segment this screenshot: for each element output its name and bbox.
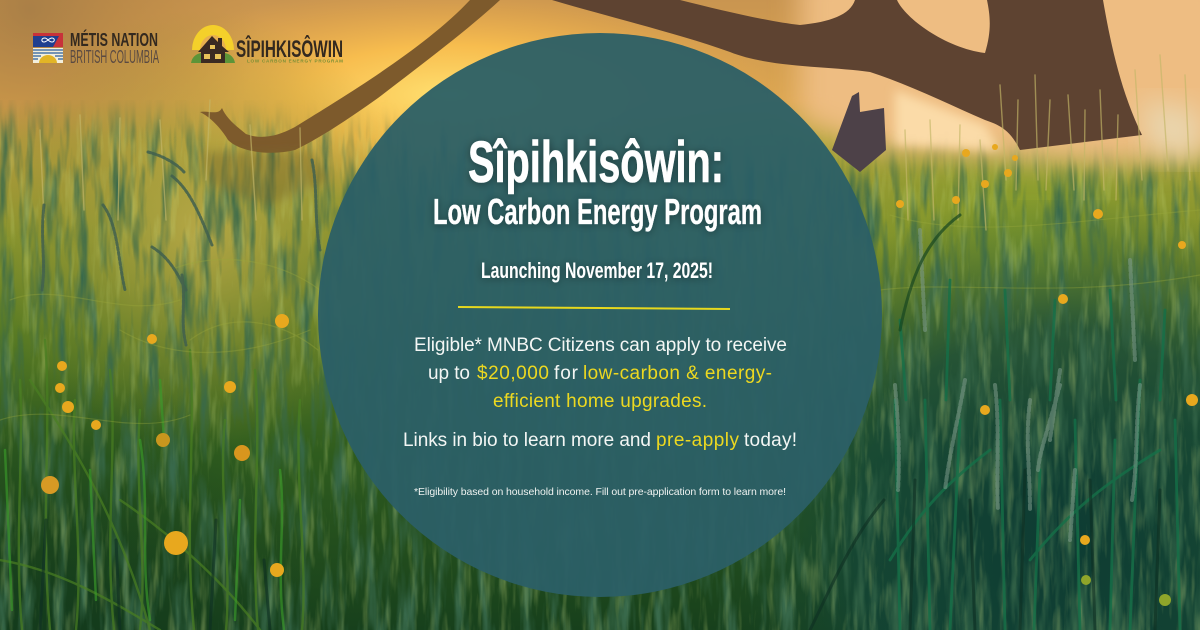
- text block: eligibility statement: efficient home upgrades.: [493, 391, 707, 412]
- text block: eligibility statement: Eligible* MNBC Citizens can apply to receive: [414, 335, 787, 356]
- logo: Métis Nation British Columbia: [33, 29, 159, 67]
- text block: call to action: Links in bio to learn more and: [403, 430, 651, 451]
- tree: fallen trunk and branches: [200, 0, 1142, 205]
- title: Sîpihkisôwin:: [468, 130, 724, 195]
- text block: eligibility statement: $20,000: [477, 363, 549, 384]
- icon: MNBC flag and crest: [33, 33, 63, 63]
- text block: eligibility statement: up to: [428, 363, 470, 384]
- text: Sîpihkisôwin wordmark: SÎPIHKISÔWIN: [236, 35, 343, 63]
- text block: eligibility statement: low-carbon & energy-: [583, 363, 772, 384]
- footnote: *Eligibility based on household income. Fill out pre-application form to learn more!: [414, 486, 786, 498]
- text: British Columbia: BRITISH COLUMBIA: [70, 47, 159, 67]
- icon: sun rays behind house: [192, 25, 234, 50]
- text block: eligibility statement: [414, 335, 787, 412]
- launch date: Launching November 17, 2025!: [481, 258, 713, 283]
- logo: Sîpihkisôwin: [191, 25, 343, 64]
- icon: house: [198, 36, 229, 63]
- text: Métis Nation: MÉTIS NATION: [70, 29, 158, 50]
- text block: eligibility statement: for: [554, 363, 579, 384]
- subtitle: Low Carbon Energy Program: [433, 191, 762, 232]
- text block: call to action: today!: [744, 430, 797, 451]
- text block: call to action: pre-apply: [656, 430, 740, 451]
- yellow buttercup flowers: [41, 144, 1198, 606]
- panel: teal circle: [318, 33, 882, 597]
- yellow divider line: [458, 307, 730, 309]
- icon: green arcs: [191, 53, 235, 63]
- text block: call to action: [403, 430, 797, 451]
- text: low carbon energy program tagline: LOW CARBON ENERGY PROGRAM: [247, 58, 343, 64]
